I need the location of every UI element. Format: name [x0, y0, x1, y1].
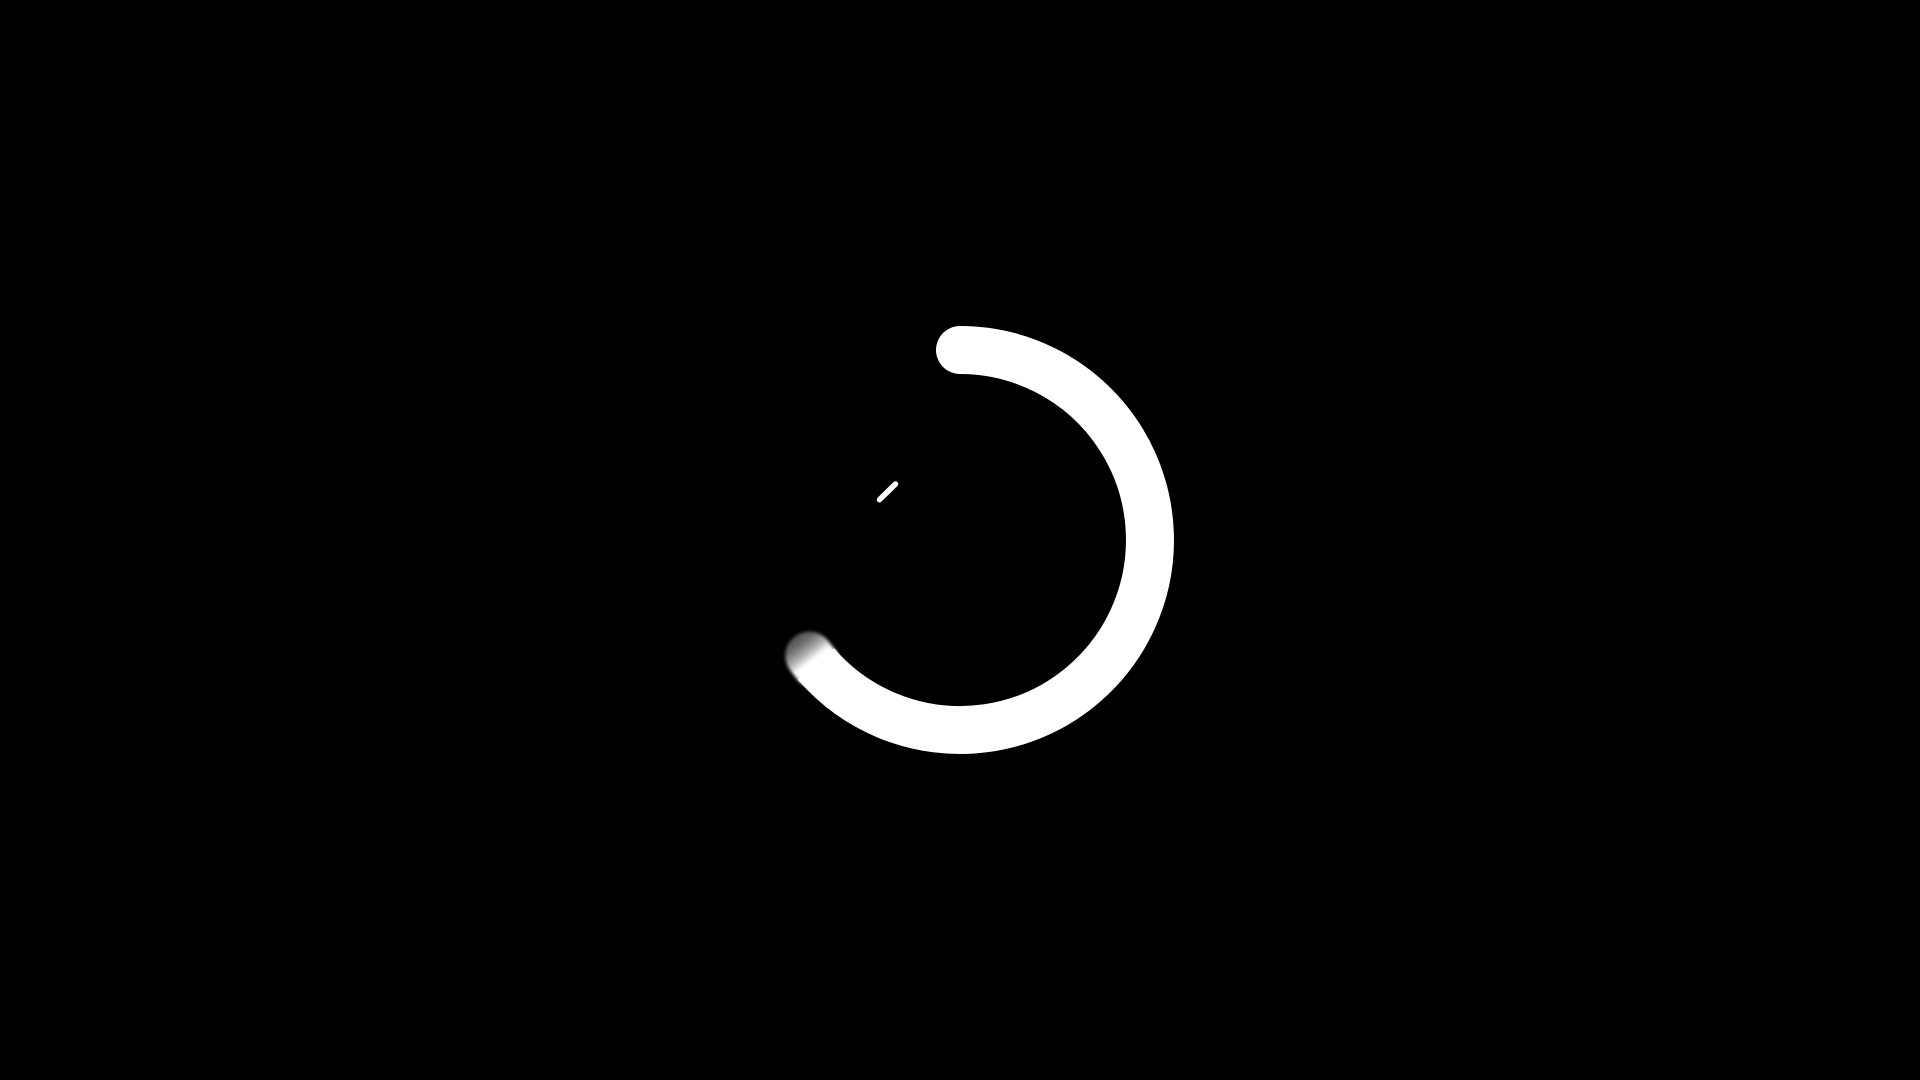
small diagonal tick mark [880, 484, 896, 500]
arc rounded start cap [936, 326, 984, 374]
progress arc [816, 350, 1150, 730]
fading arc end cap [809, 656, 816, 664]
